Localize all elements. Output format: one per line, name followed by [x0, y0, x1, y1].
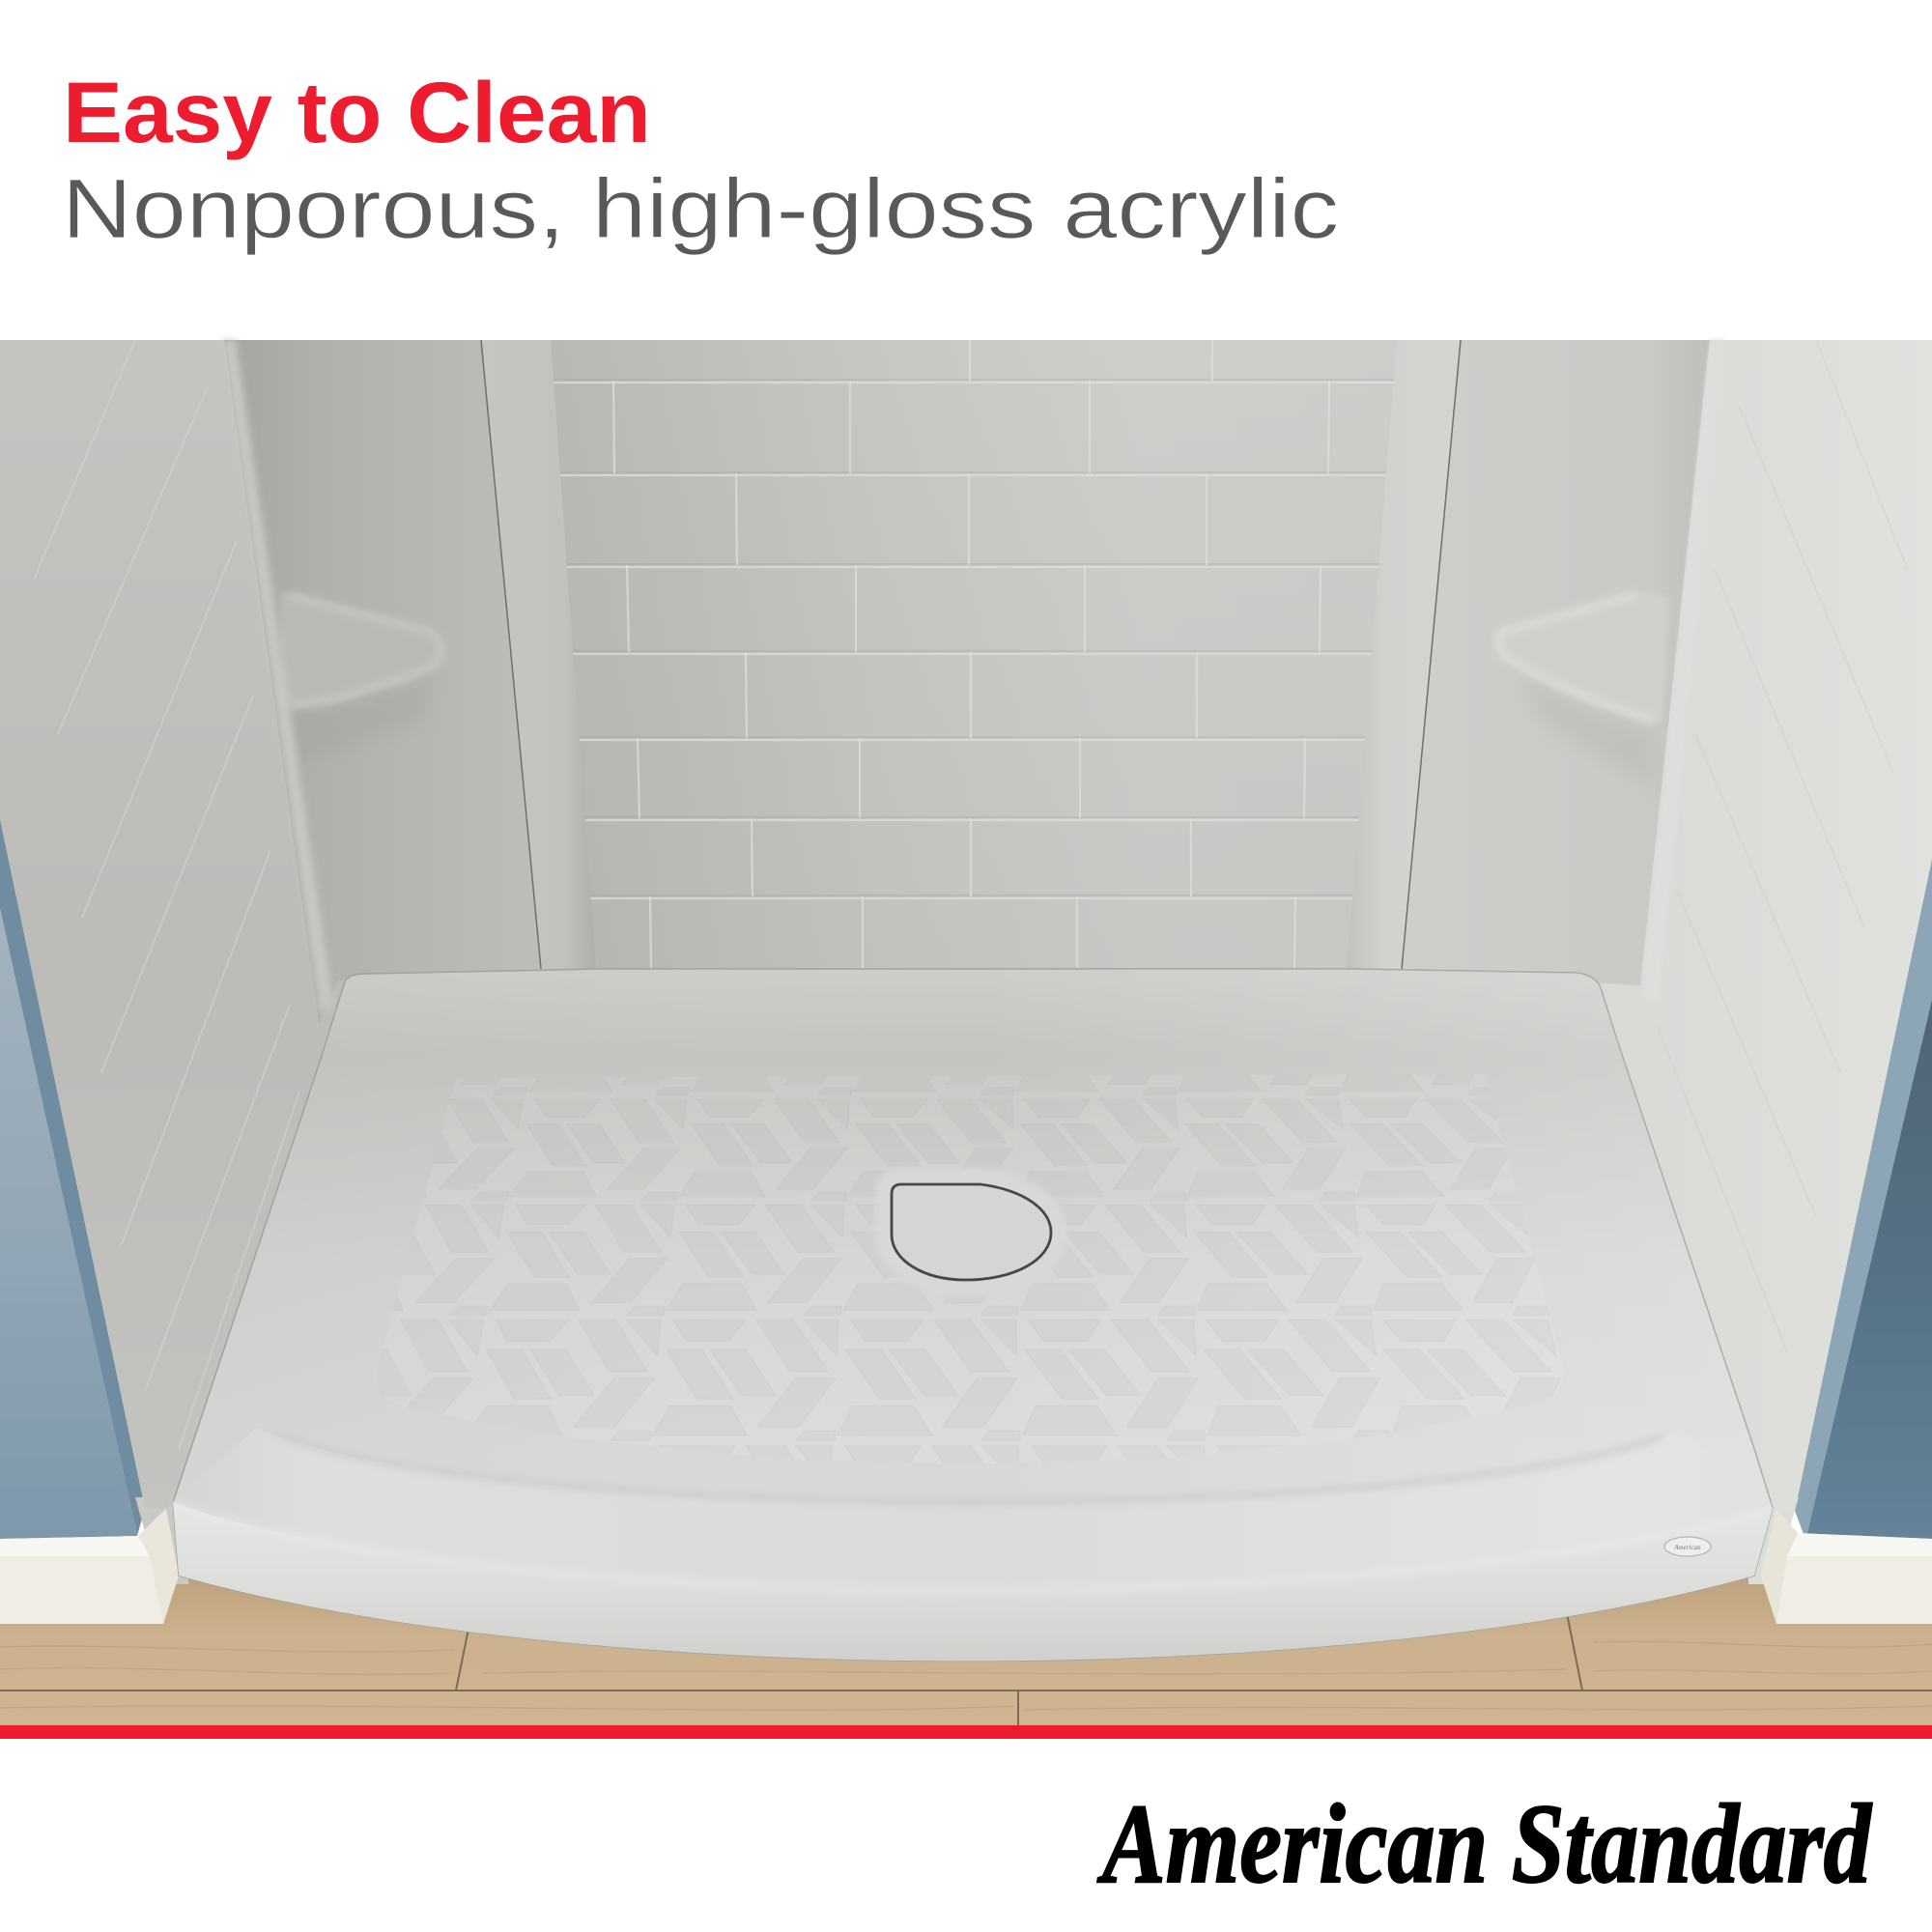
right baseboard [1761, 1509, 1932, 1624]
right soap shelf [1498, 591, 1669, 787]
tray front face [173, 1502, 1773, 1662]
left soap shelf [280, 591, 443, 763]
panel seams [481, 340, 1461, 969]
left blue wall [0, 819, 145, 1540]
rim crease highlight [173, 1502, 1773, 1590]
subtitle: Nonporous, high-gloss acrylic [62, 162, 1339, 256]
left inner corner wall [224, 340, 541, 1024]
tray logo badge: American [1673, 1544, 1701, 1551]
corner trim strips [222, 340, 1725, 1014]
right outer wall panel [1584, 340, 1932, 1511]
title: Easy to Clean [63, 64, 651, 160]
left outer wall panel [0, 340, 350, 1508]
right blue wall [1795, 859, 1932, 1546]
gap behind tray corners [135, 1497, 1799, 1584]
subway tile back wall [541, 340, 1410, 973]
anti-slip mat pattern [402, 1162, 1561, 1462]
shower tray [173, 969, 1773, 1662]
tray logo badge [1664, 1537, 1711, 1556]
shower photo scene [0, 336, 1932, 1725]
right inner corner wall [1402, 340, 1710, 985]
red divider bar [0, 1725, 1932, 1739]
drain cover [892, 1184, 1051, 1280]
tray rim [173, 1428, 1773, 1590]
left baseboard [0, 1509, 179, 1624]
back wall trim frame [481, 340, 1461, 972]
basin edge shadow [275, 1434, 1662, 1502]
floor [0, 1565, 1932, 1725]
